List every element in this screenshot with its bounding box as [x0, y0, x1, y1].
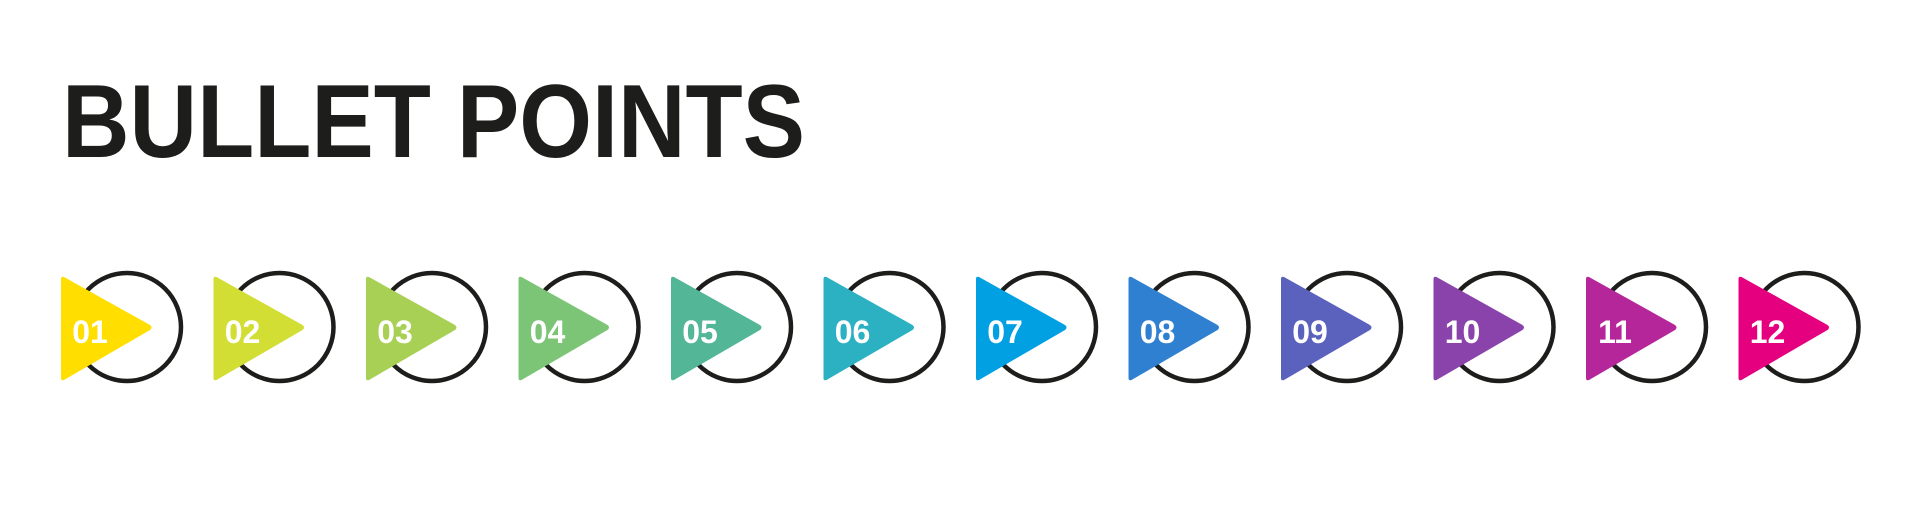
- bullet 04: 04: [530, 314, 566, 350]
- title: BULLET POINTS: [62, 64, 805, 180]
- bullet 05: 05: [682, 314, 718, 350]
- bullet 07: 07: [987, 314, 1023, 350]
- bullet 05: [671, 273, 791, 381]
- bullet 01: [61, 273, 181, 381]
- bullet 06: 06: [835, 314, 870, 350]
- bullet 09: [1281, 273, 1401, 381]
- bullet 03: [366, 273, 486, 381]
- bullet 02: 02: [225, 314, 260, 350]
- bullet 11: [1586, 273, 1706, 381]
- bullet 08: 08: [1140, 314, 1175, 350]
- bullet 07: [976, 273, 1096, 381]
- bullet 10: 10: [1445, 314, 1480, 350]
- bullet 09: 09: [1292, 314, 1328, 350]
- bullet 08: [1128, 273, 1248, 381]
- bullet 10: [1434, 273, 1554, 381]
- bullet 12: 12: [1750, 314, 1785, 350]
- bullet 02: [214, 273, 334, 381]
- bullet 01: 01: [72, 314, 108, 350]
- bullet 04: [518, 273, 638, 381]
- bullet 11: 11: [1598, 314, 1632, 350]
- bullet 06: [824, 273, 944, 381]
- bullet 12: [1738, 273, 1858, 381]
- bullet 03: 03: [377, 314, 413, 350]
